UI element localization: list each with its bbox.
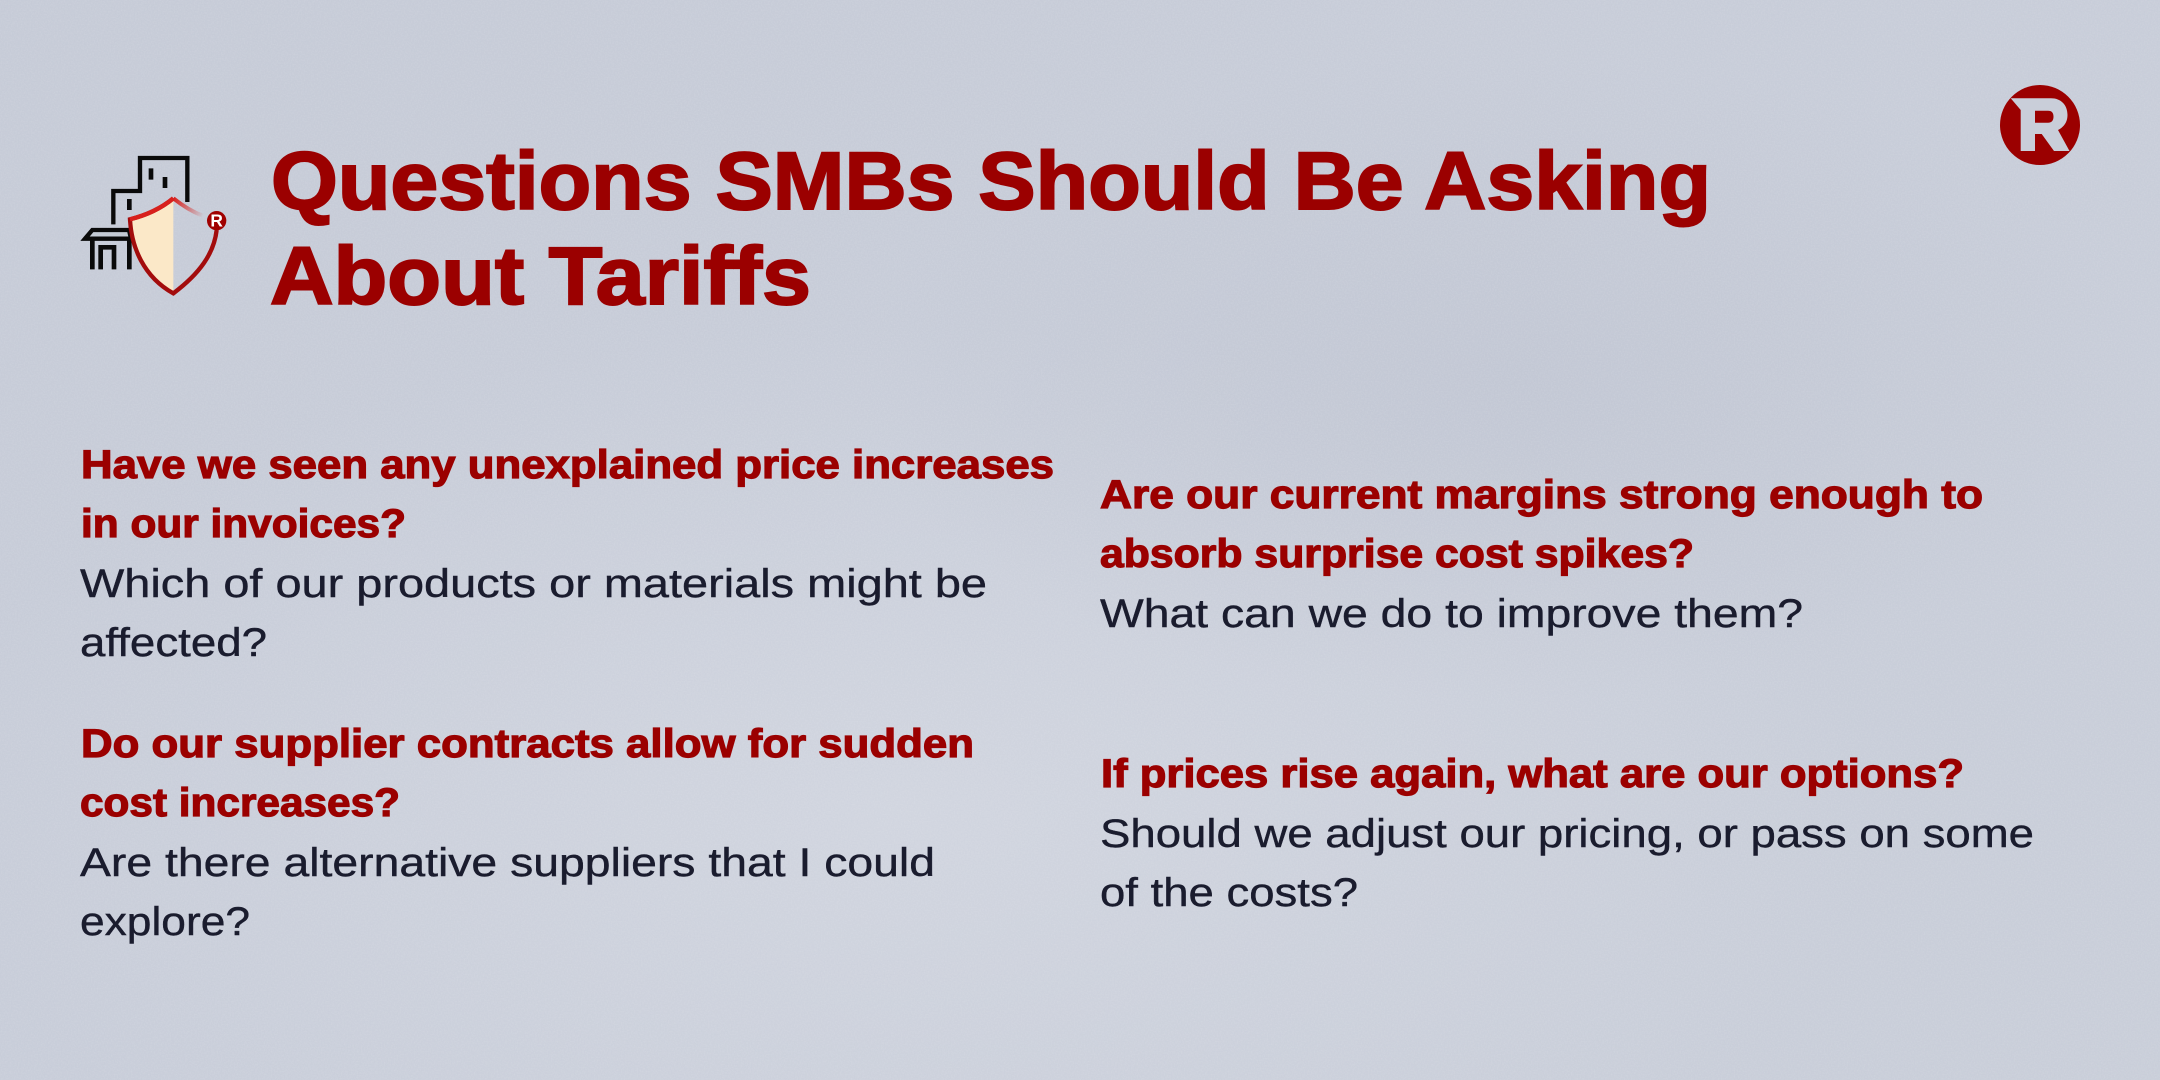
question block 3	[1100, 473, 1983, 636]
question block 4: Should we adjust our pricing, or pass on some	[1100, 812, 2034, 856]
question block 1: affected?	[80, 621, 267, 665]
question block 4: of the costs?	[1100, 871, 1358, 915]
question block 2: Do our supplier contracts allow for sudden	[81, 722, 974, 766]
question block 4	[1100, 752, 2034, 915]
title: About Tariffs	[270, 231, 811, 322]
question block 1: Have we seen any unexplained price increases	[81, 443, 1054, 487]
icon: building with shield	[85, 158, 226, 293]
icon: building with shield: R	[210, 211, 223, 231]
question block 2: explore?	[80, 900, 250, 944]
question block 2	[80, 722, 974, 944]
question block 3: What can we do to improve them?	[1100, 592, 1803, 636]
question block 1	[80, 443, 1054, 665]
title: Questions SMBs Should Be Asking	[271, 136, 1711, 227]
question block 3: absorb surprise cost spikes?	[1100, 532, 1694, 576]
question block 1: Which of our products or materials might be	[80, 562, 987, 606]
question block 1: in our invoices?	[81, 502, 406, 546]
question block 2: cost increases?	[80, 781, 400, 825]
title	[270, 136, 1711, 322]
logo: R badge	[2000, 85, 2080, 165]
question block 2: Are there alternative suppliers that I could	[80, 841, 935, 885]
question block 4: If prices rise again, what are our options?	[1101, 752, 1964, 796]
question block 3: Are our current margins strong enough to	[1100, 473, 1983, 517]
